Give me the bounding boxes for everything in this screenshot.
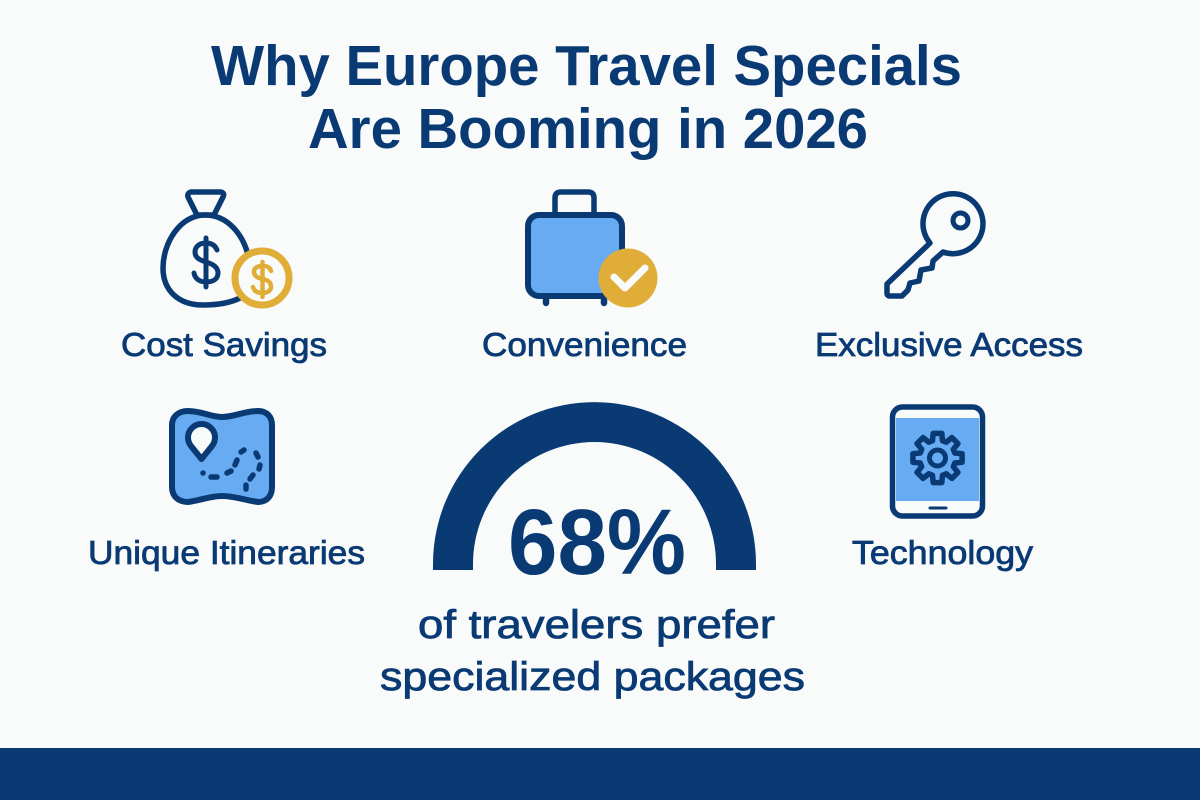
icon: key [887, 194, 983, 296]
icon: tablet with gear [892, 407, 982, 516]
stat caption: of travelers prefer [418, 603, 775, 647]
title: Why Europe Travel Specials [211, 34, 962, 98]
stat number: 68% [508, 490, 686, 594]
label: exclusive access: Exclusive Access [815, 326, 1083, 363]
stat caption [380, 603, 805, 699]
stat caption: specialized packages [380, 655, 805, 699]
item: cost savings [121, 192, 327, 363]
label: technology: Technology [852, 534, 1034, 571]
icon: suitcase with check badge [528, 192, 658, 308]
icon: map with pin and route [172, 411, 272, 502]
item: exclusive access [815, 194, 1083, 363]
item: convenience [482, 192, 687, 363]
footer band [0, 748, 1200, 800]
label: unique itineraries: Unique Itineraries [88, 534, 365, 571]
label: cost savings: Cost Savings [121, 326, 327, 363]
chart: half-ring gauge [433, 402, 756, 570]
title [211, 34, 962, 161]
icon: money bag with coin [163, 192, 289, 305]
title: Are Booming in 2026 [308, 97, 868, 161]
item: unique itineraries [88, 411, 365, 571]
label: convenience: Convenience [482, 326, 687, 363]
stat: 68 percent gauge [380, 402, 805, 699]
item: technology [852, 407, 1034, 571]
